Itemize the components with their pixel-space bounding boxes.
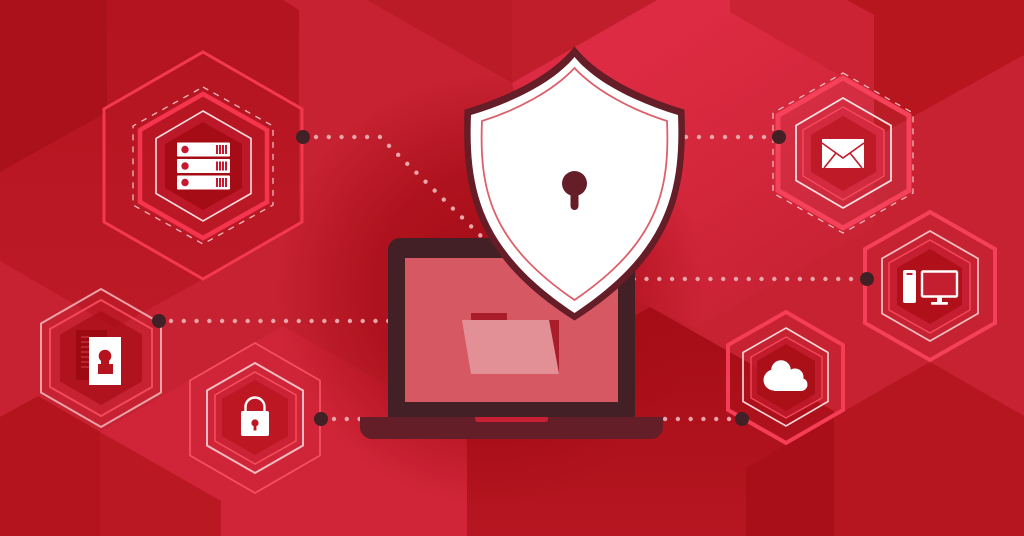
hexagon badge: padlock — [190, 343, 320, 493]
connector: padlock to laptop — [334, 417, 365, 421]
icon: desktop computer — [903, 270, 957, 305]
node: server — [296, 130, 310, 144]
connector: mail to shield — [682, 135, 764, 139]
node: computer — [860, 272, 874, 286]
hexagon badge: cloud — [728, 312, 843, 443]
hexagon badge: computer — [865, 212, 995, 360]
laptop — [360, 238, 663, 439]
hexagon badge: server — [104, 52, 302, 279]
connector: computer to laptop — [632, 277, 851, 281]
connector: server to shield — [316, 137, 485, 240]
node: mail — [772, 130, 786, 144]
icon: keyhole — [562, 171, 587, 210]
node: cloud — [735, 412, 749, 426]
connector: contacts to laptop — [171, 319, 392, 323]
icon: padlock — [241, 398, 269, 436]
icon: folder — [462, 313, 559, 374]
hexagon badge: mail — [773, 73, 913, 233]
node: padlock — [314, 412, 328, 426]
node: contacts — [152, 314, 166, 328]
icon: address book — [76, 330, 121, 385]
shield — [465, 47, 684, 320]
icon: envelope — [822, 139, 864, 168]
icon: cloud — [764, 360, 808, 391]
hexagon badge: contacts — [41, 289, 161, 427]
connector: cloud to laptop — [660, 417, 729, 421]
icon: server rack — [177, 142, 230, 190]
